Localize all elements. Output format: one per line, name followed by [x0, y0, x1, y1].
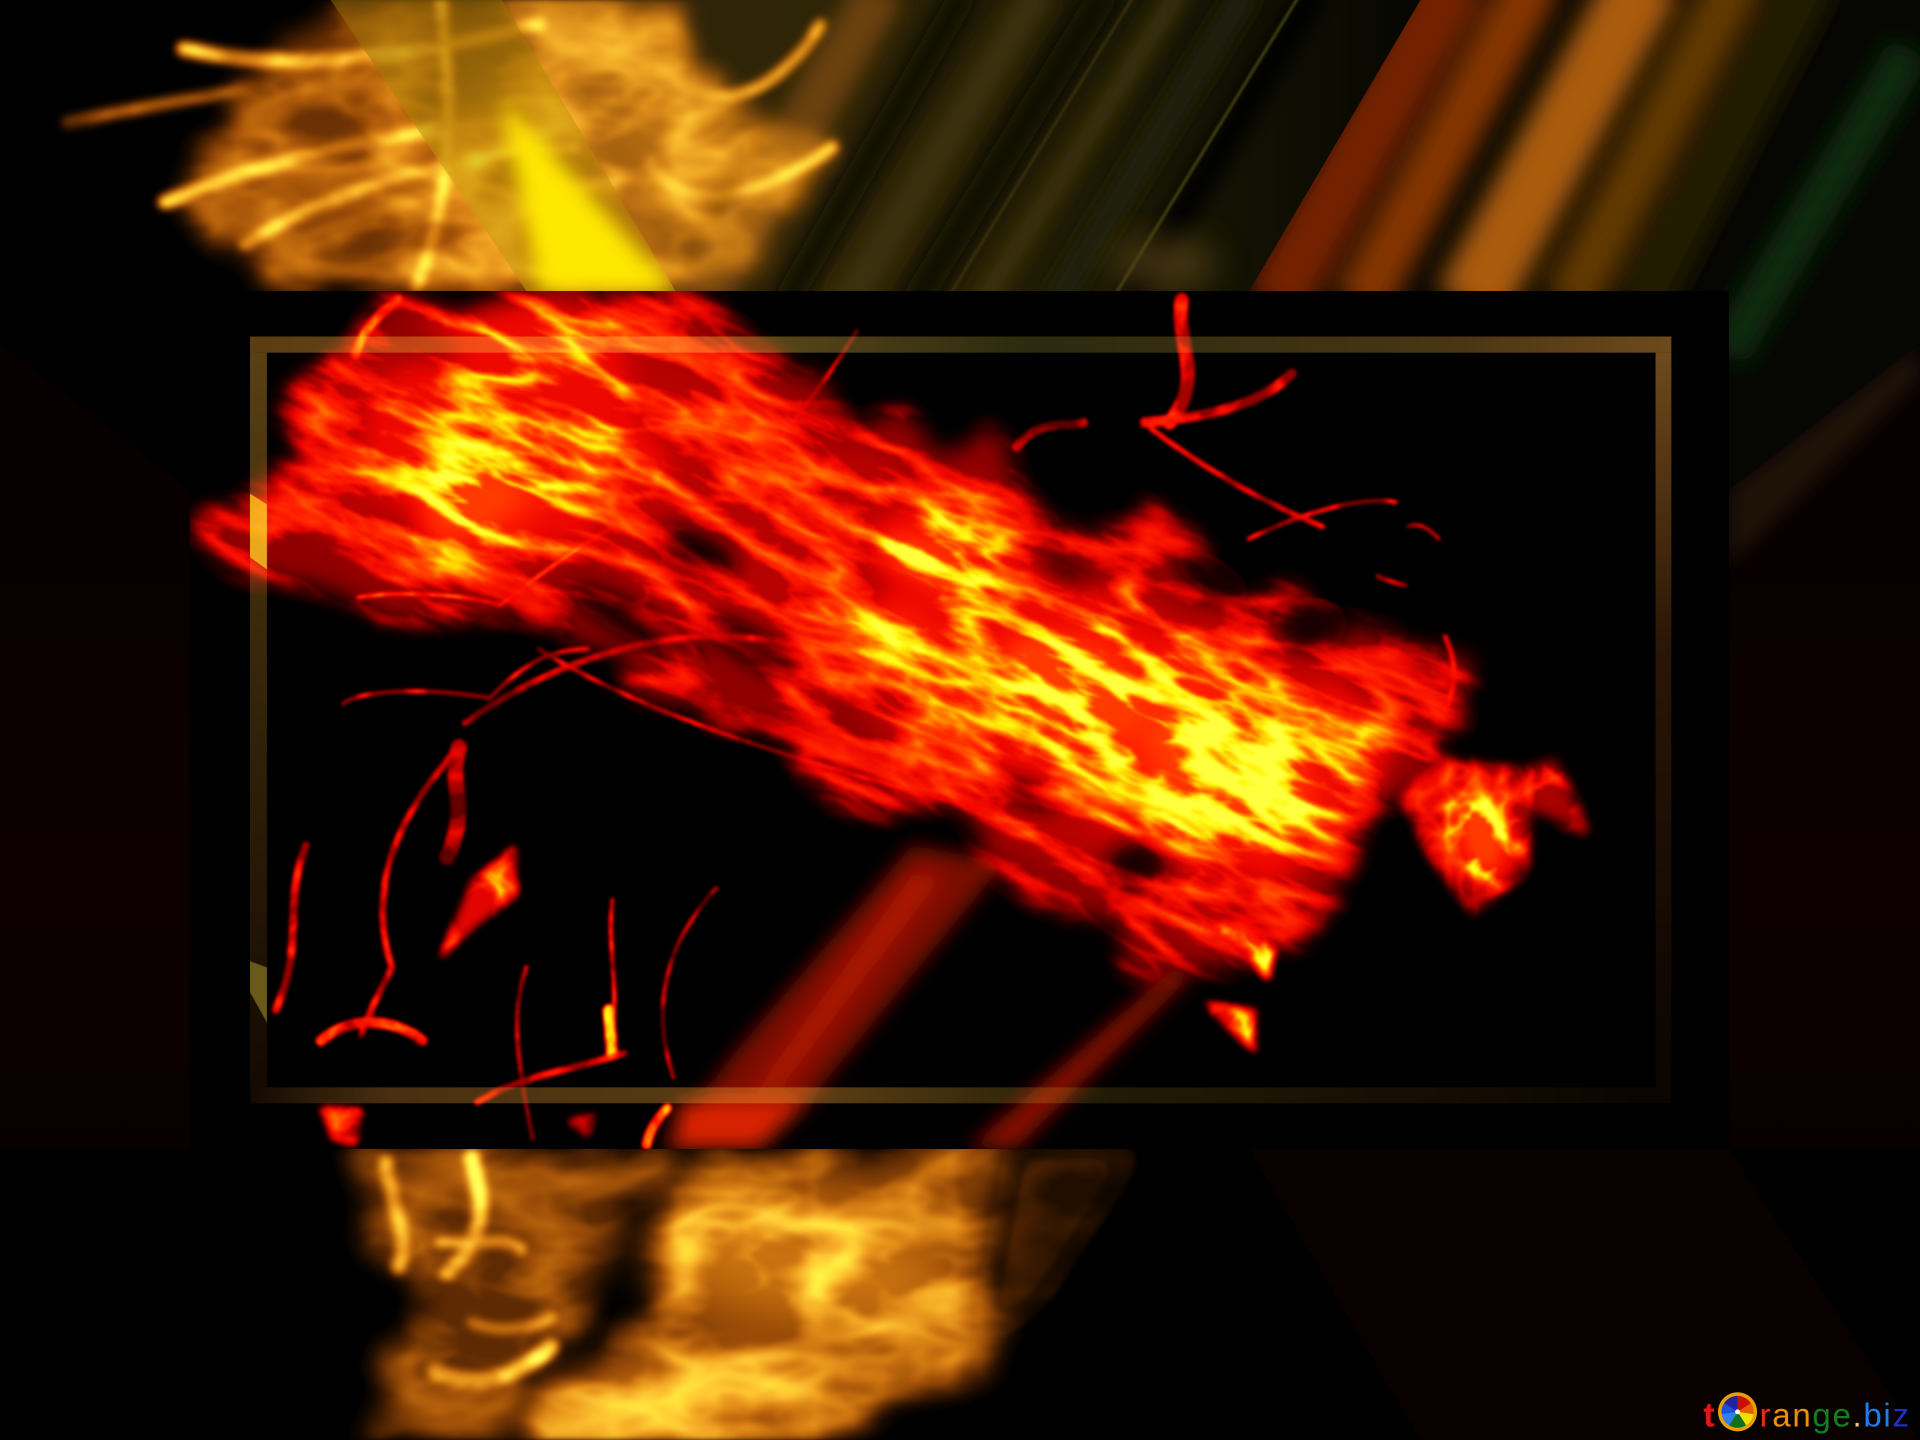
lower red light streaks [661, 845, 1194, 1149]
dim lower right facet [1249, 1149, 1920, 1440]
hottest centre [417, 463, 1322, 848]
flame filaments [276, 300, 1454, 1145]
bottom flames [349, 1149, 1139, 1440]
dark gaps in the flame [564, 512, 1347, 888]
deep red body [193, 294, 1457, 973]
wisps, tongue and embers [276, 300, 1587, 1145]
yellow flame cores [410, 447, 1329, 857]
top middle streak panel [502, 0, 1420, 306]
dim side and bottom facets [0, 343, 1920, 1440]
watermark [1703, 1392, 1909, 1435]
watermark text: range.biz [1760, 1398, 1909, 1435]
ember flames [321, 847, 1273, 1145]
orange flame zones [361, 306, 1408, 869]
top right streak panel [1249, 0, 1920, 490]
translucent frame [250, 337, 1671, 1103]
top left flames [67, 0, 833, 291]
bright red zones [306, 324, 1408, 937]
watermark orange wheel icon [1718, 1392, 1757, 1431]
right flame tongue [1402, 759, 1587, 912]
bright yellow triangle [331, 0, 676, 291]
watermark letter t: t [1703, 1397, 1715, 1435]
central black panel [190, 291, 1729, 1149]
